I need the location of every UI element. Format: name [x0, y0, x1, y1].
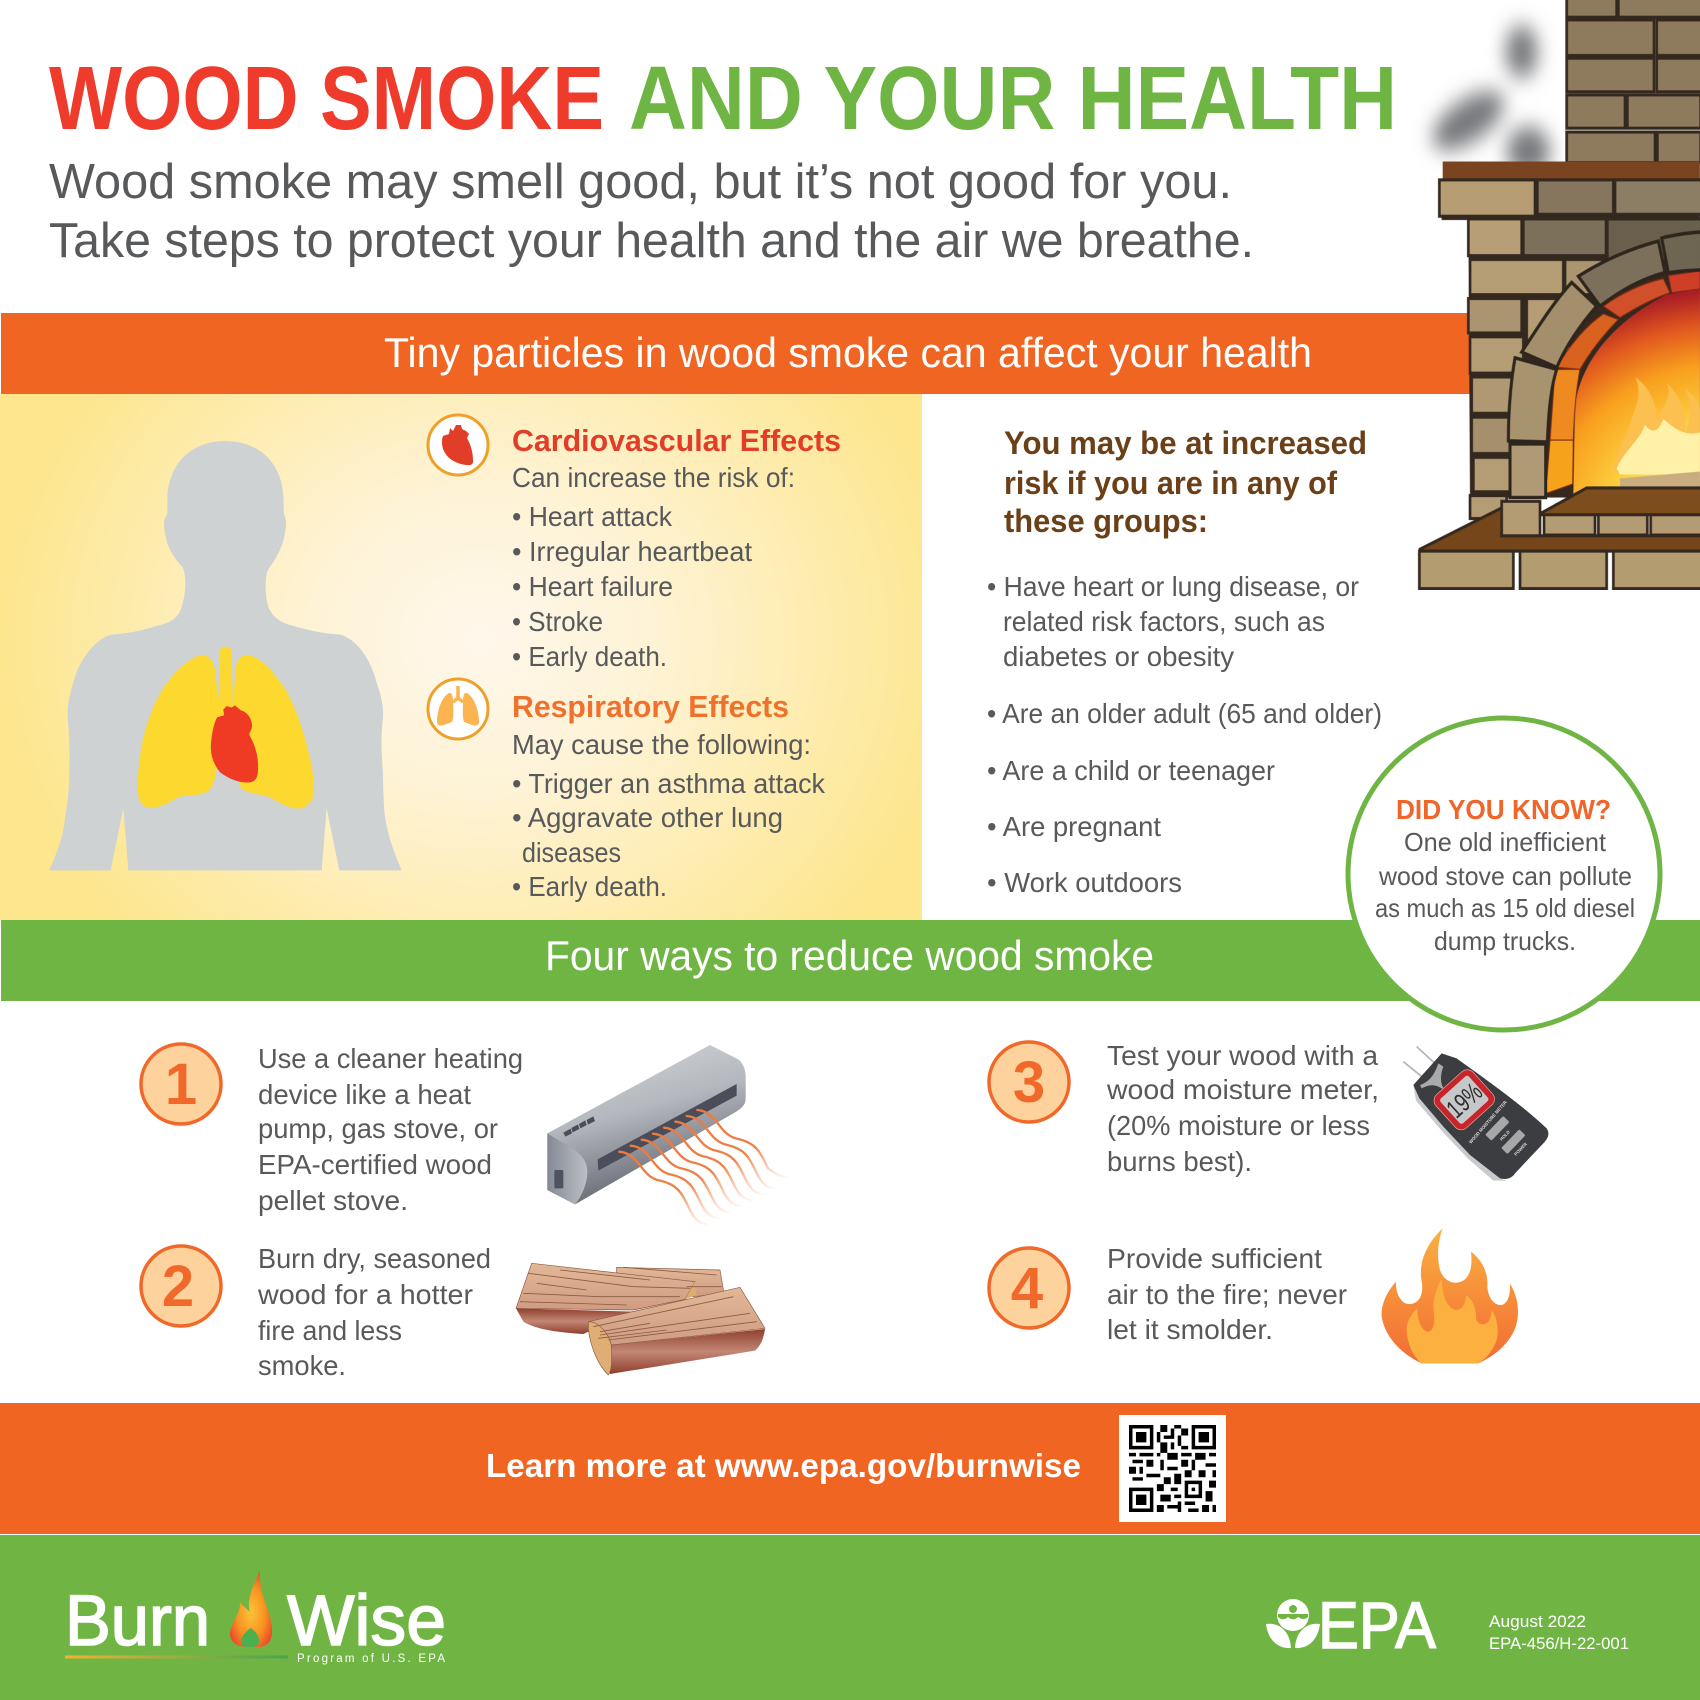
banner: four ways	[1, 920, 1700, 1001]
risk groups list	[987, 571, 1382, 898]
step 1 text: Use a cleaner heating	[258, 1043, 523, 1074]
footer band	[0, 1535, 1700, 1700]
step 4 text	[1107, 1243, 1347, 1345]
wall base	[1439, 180, 1700, 498]
risk groups list: diabetes or obesity	[1003, 641, 1234, 672]
firebox	[1573, 289, 1700, 494]
risk groups heading: You may be at increased	[1004, 425, 1367, 461]
text: cardiovascular effects: Can increase the risk of:	[512, 462, 795, 493]
callout: did you know: dump trucks.	[1434, 926, 1576, 956]
icon: lungs badge	[428, 679, 488, 739]
text: respiratory effects: diseases	[522, 837, 621, 868]
heat waves	[619, 1110, 787, 1224]
risk groups list: • Have heart or lung disease, or	[987, 571, 1359, 602]
step 2 text: smoke.	[258, 1350, 346, 1381]
text: respiratory effects: • Early death.	[512, 871, 667, 902]
illustration: fireplace	[1419, 0, 1700, 589]
step 2 text: Burn dry, seasoned	[258, 1243, 491, 1274]
callout: did you know: wood stove can pollute	[1378, 861, 1632, 891]
text: respiratory effects: May cause the following:	[512, 729, 811, 760]
QR code	[1119, 1415, 1226, 1522]
step 1 text: EPA-certified wood	[258, 1149, 492, 1180]
icon: EPA flower	[1266, 1599, 1320, 1648]
step 2 text	[257, 1243, 491, 1381]
hearth	[1419, 488, 1700, 589]
step 1	[141, 1043, 787, 1224]
risk groups list: • Are a child or teenager	[987, 755, 1275, 786]
icon: moisture meter: POWER	[1513, 1141, 1529, 1157]
step 3 text	[1106, 1040, 1379, 1177]
arch ring	[1546, 271, 1700, 494]
subtitle	[49, 155, 1254, 268]
text: cardiovascular effects: • Irregular heartbeat	[512, 536, 752, 567]
callout: did you know	[1348, 718, 1660, 1030]
mantel stones	[1439, 180, 1700, 519]
number badge 2: 2	[162, 1254, 194, 1319]
text: cardiovascular effects: • Stroke	[512, 606, 603, 637]
title	[49, 49, 1397, 149]
callout: did you know: DID YOU KNOW?	[1396, 794, 1611, 825]
icon: flame	[1382, 1228, 1518, 1363]
number badge 3	[989, 1042, 1069, 1122]
step 1 text: pellet stove.	[258, 1185, 408, 1216]
logo: Burn Wise: Wise	[287, 1582, 446, 1661]
step 3	[989, 1040, 1548, 1181]
text: respiratory effects	[512, 689, 826, 902]
number badge 1: 1	[165, 1052, 197, 1117]
risk groups heading: these groups:	[1004, 503, 1208, 539]
icon: Burn Wise flame	[230, 1570, 272, 1647]
icon: heat pump	[547, 1045, 787, 1224]
number badge 2	[141, 1246, 221, 1326]
banner: learn more	[0, 1403, 1700, 1534]
step 4 text: Provide sufficient	[1107, 1243, 1322, 1274]
text: respiratory effects: • Aggravate other lung	[512, 802, 783, 833]
lungs	[137, 647, 314, 809]
text: respiratory effects: • Trigger an asthma attack	[512, 768, 826, 799]
icon: moisture meter: WOOD MOISTURE METER	[1468, 1099, 1508, 1145]
title: WOOD SMOKE	[49, 49, 604, 149]
risk groups heading	[1004, 425, 1367, 539]
step 2	[141, 1243, 765, 1381]
step 3 text: (20% moisture or less	[1107, 1110, 1370, 1141]
icon: heart badge	[428, 415, 488, 475]
text: cardiovascular effects: Cardiovascular Effects	[512, 423, 841, 458]
publication info	[1489, 1612, 1629, 1653]
banner: tiny particles: Tiny particles in wood smoke can affect your health	[384, 329, 1312, 376]
icon: moisture meter: HOLD	[1499, 1129, 1511, 1142]
subtitle: Wood smoke may smell good, but it’s not good for you.	[49, 155, 1232, 209]
banner: learn more: Learn more at www.epa.gov/burnwise	[486, 1447, 1081, 1484]
number badge 4	[989, 1248, 1069, 1328]
risk groups list: • Are pregnant	[987, 811, 1161, 842]
step 4 text: let it smolder.	[1107, 1314, 1273, 1345]
number badge 3: 3	[1013, 1050, 1045, 1115]
flames	[1613, 377, 1700, 475]
banner: four ways: Four ways to reduce wood smoke	[545, 932, 1154, 979]
arch stones	[1508, 232, 1700, 498]
logo: Burn Wise	[65, 1570, 446, 1665]
risk groups list: • Are an older adult (65 and older)	[987, 698, 1382, 729]
log in fire	[1620, 471, 1700, 487]
icon: moisture meter	[1403, 1047, 1548, 1181]
step 4	[989, 1228, 1518, 1363]
logo: EPA	[1266, 1588, 1436, 1662]
heart	[211, 705, 258, 783]
risk groups list: related risk factors, such as	[1003, 606, 1325, 637]
risk groups heading: risk if you are in any of	[1004, 465, 1337, 501]
text: cardiovascular effects: • Heart failure	[512, 571, 673, 602]
step 1 text: device like a heat	[258, 1079, 471, 1110]
text: cardiovascular effects	[512, 423, 841, 672]
text: cardiovascular effects: • Heart attack	[512, 501, 673, 532]
smoke	[1425, 25, 1550, 176]
callout: did you know: One old inefficient	[1404, 827, 1607, 857]
panel: health effects	[0, 394, 922, 920]
publication info: August 2022	[1489, 1612, 1586, 1631]
step 1 text: pump, gas stove, or	[258, 1113, 498, 1144]
step 2 text: wood for a hotter	[257, 1279, 473, 1310]
number badge 1	[141, 1044, 221, 1124]
step 3 text: Test your wood with a	[1107, 1040, 1378, 1071]
step 3 text: burns best).	[1107, 1146, 1252, 1177]
logo: Burn Wise: Burn	[65, 1582, 210, 1661]
chimney bricks	[1567, 0, 1700, 163]
number badge 4: 4	[1011, 1256, 1043, 1321]
step 4 text: air to the fire; never	[1107, 1279, 1347, 1310]
banner: tiny particles	[1, 313, 1481, 394]
mantel	[1443, 161, 1700, 179]
text: cardiovascular effects: • Early death.	[512, 641, 667, 672]
logo: EPA: EPA	[1318, 1588, 1436, 1662]
body illustration	[49, 441, 402, 870]
title: AND YOUR HEALTH	[629, 49, 1397, 149]
publication info: EPA-456/H-22-001	[1489, 1634, 1629, 1653]
subtitle: Take steps to protect your health and the air we breathe.	[49, 214, 1254, 268]
icon: moisture meter: 19%	[1440, 1077, 1488, 1124]
text: respiratory effects: Respiratory Effects	[512, 689, 789, 724]
logo: Burn Wise: Program of U.S. EPA	[297, 1653, 445, 1665]
callout: did you know: as much as 15 old diesel	[1375, 893, 1635, 923]
icon: logs	[516, 1263, 765, 1375]
risk groups list: • Work outdoors	[987, 867, 1182, 898]
body silhouette	[49, 441, 402, 870]
step 3 text: wood moisture meter,	[1106, 1074, 1379, 1105]
step 1 text	[258, 1043, 523, 1216]
step 2 text: fire and less	[258, 1315, 402, 1346]
